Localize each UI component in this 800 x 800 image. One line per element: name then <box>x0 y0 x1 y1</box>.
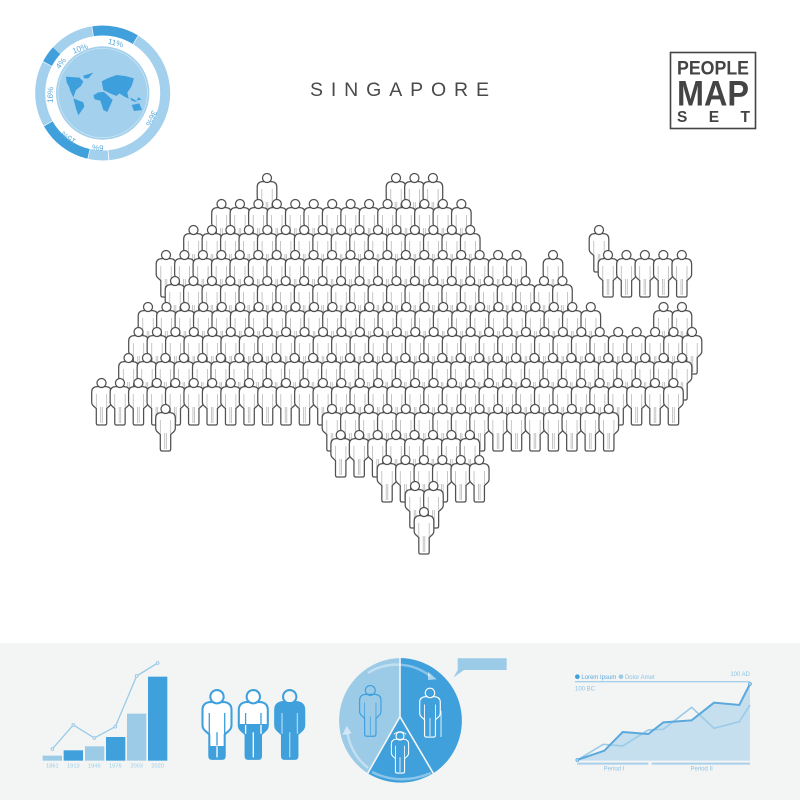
pie: bottom segment <box>368 717 433 783</box>
area <box>577 684 750 761</box>
bar chart with trend line: 1945 <box>88 763 101 769</box>
row 10 <box>331 430 480 477</box>
icon: person half fill <box>239 690 268 759</box>
bar chart with trend line <box>43 662 167 769</box>
donut chart with world globe <box>14 5 191 181</box>
period bars <box>577 761 750 767</box>
donut labels <box>46 37 159 152</box>
line chart: Lorem Ipsum <box>581 675 616 681</box>
series: dark <box>577 684 750 760</box>
axis <box>575 680 750 684</box>
row 3 <box>156 250 692 297</box>
arrows <box>348 665 431 779</box>
icon: person low fill <box>202 690 232 759</box>
badge: people map set: MAP <box>677 74 749 114</box>
row 5 <box>138 302 692 349</box>
row 8 <box>92 378 683 425</box>
pie: right segment <box>400 658 462 773</box>
row 11 <box>377 456 489 502</box>
donut labels: 6% <box>92 143 104 152</box>
row 6 <box>129 328 702 374</box>
donut labels: 36% <box>144 109 159 127</box>
donut labels: 16% <box>46 87 55 103</box>
row 7 <box>119 354 692 400</box>
bar chart with trend line: 1913 <box>67 763 80 769</box>
line chart: Period I <box>604 766 625 772</box>
bar chart with trend line: 2003 <box>130 763 143 769</box>
line chart: 100 BC <box>575 686 596 692</box>
badge: people map set: SET <box>677 109 751 126</box>
line chart: Dolor Amet <box>625 675 655 681</box>
donut labels: 11% <box>107 37 124 49</box>
icon: person full fill <box>275 690 304 759</box>
row 4 <box>165 276 572 323</box>
row 12 <box>405 482 443 528</box>
line chart: Period II <box>691 766 713 772</box>
donut labels: 15% <box>59 129 78 146</box>
donut labels: 4% <box>54 56 68 71</box>
badge: people map set: PEOPLE <box>677 58 749 80</box>
bar chart with trend line: 2020 <box>151 763 164 769</box>
line chart <box>575 672 751 772</box>
callout <box>454 658 507 678</box>
line chart: 100 AD <box>730 672 751 678</box>
donut segments <box>14 5 191 181</box>
person: child <box>391 732 409 773</box>
row 13 <box>414 508 434 554</box>
bar chart with trend line: 1976 <box>109 763 122 769</box>
row 2 <box>184 226 609 272</box>
donut labels: 10% <box>71 42 89 56</box>
globe disc <box>56 46 149 140</box>
pie: left segment <box>339 658 400 773</box>
row 9 <box>156 404 619 451</box>
pie chart with people <box>339 658 462 783</box>
person: elderly with cane <box>420 688 441 737</box>
badge: people map set <box>670 52 756 128</box>
legend <box>575 674 580 679</box>
people map of Singapore <box>92 174 702 554</box>
bar chart with trend line: 1861 <box>46 763 59 769</box>
row 0 <box>257 174 443 220</box>
title: SINGAPORE <box>310 79 489 101</box>
world map continents <box>66 73 142 115</box>
bottom infographic band <box>0 643 800 800</box>
series: light <box>577 705 750 760</box>
person: adult <box>360 686 381 736</box>
row 1 <box>212 200 471 246</box>
